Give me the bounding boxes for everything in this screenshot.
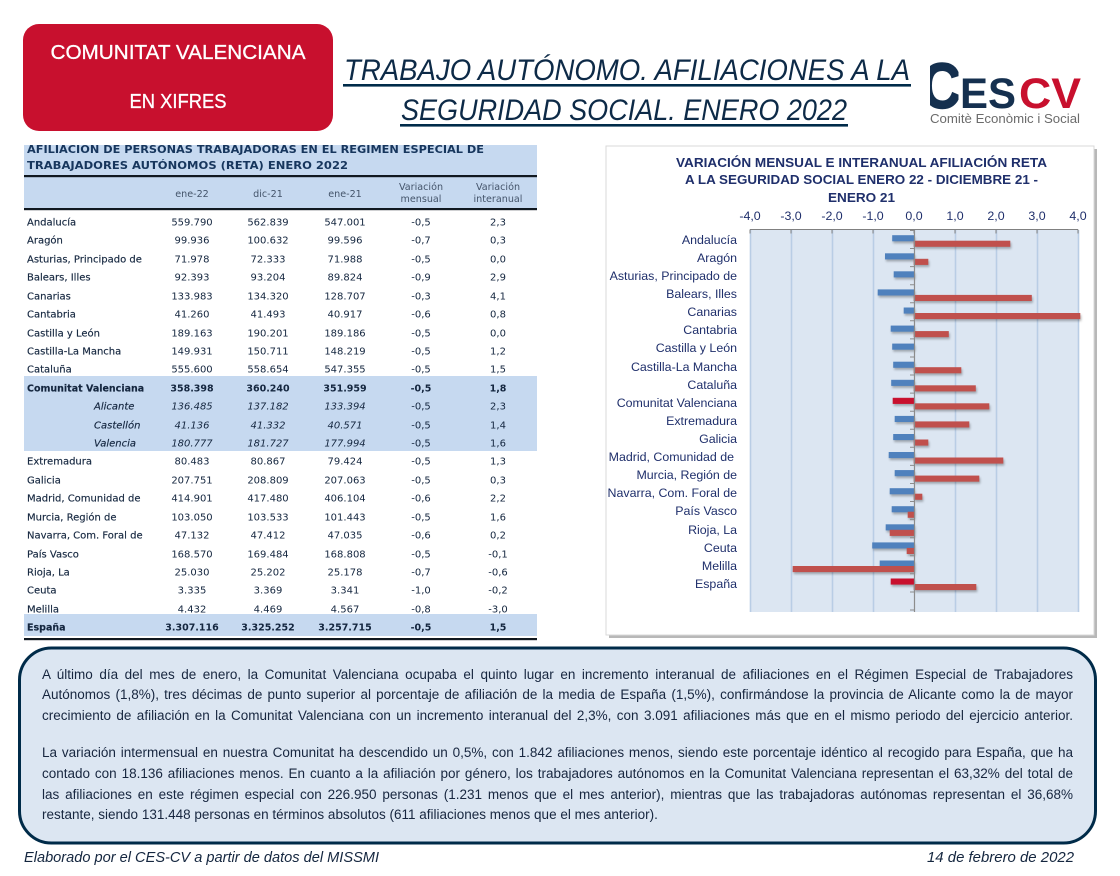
table rows: -0,6 [411, 494, 431, 504]
chart category labels: Andalucía [682, 233, 737, 247]
main title: SEGURIDAD SOCIAL. ENERO 2022 [401, 94, 847, 127]
chart category labels: Murcia, Región de [636, 468, 737, 482]
chart x axis labels [739, 209, 1087, 234]
table rows: Castellón [94, 420, 140, 432]
table rows: -0,5 [411, 328, 431, 340]
table rows: Cantabria [27, 310, 76, 320]
table rows: 40.917 [328, 310, 362, 320]
table rows: 181.727 [247, 438, 289, 450]
table rows: Castilla y León [27, 328, 100, 340]
table rows: 559.790 [171, 218, 213, 228]
table rows: 137.182 [247, 402, 289, 412]
red badge: Comunitat Valenciana en xifres: COMUNITAT VALENCIANA [50, 42, 306, 64]
table rows: Navarra, Com. Foral de [27, 530, 143, 542]
table rows: 99.596 [328, 236, 362, 246]
chart category labels: Castilla y León [656, 341, 737, 355]
chart category labels: País Vasco [675, 504, 737, 518]
table rows: 133.394 [324, 402, 366, 412]
table rows: 71.988 [328, 254, 362, 266]
table rows: 25.202 [250, 568, 286, 578]
table rows: 103.533 [247, 512, 289, 524]
table rows: -0,5 [411, 218, 431, 228]
table rows: 133.983 [171, 292, 213, 302]
table rows: -0,5 [411, 622, 431, 634]
chart category labels: Madrid, Comunidad de [609, 450, 734, 464]
table rows: -0,7 [411, 568, 431, 578]
chart x axis labels: 3,0 [1028, 209, 1046, 223]
table rows: 92.393 [174, 272, 210, 284]
table rows: 189.186 [324, 328, 366, 340]
chart x axis labels: -3,0 [780, 209, 802, 223]
chart x axis labels: -4,0 [739, 209, 761, 223]
table rows: 189.163 [171, 328, 213, 340]
chart category labels: Galicia [699, 432, 737, 446]
logo: CES-CV: C [921, 50, 961, 122]
table rows: Aragón [27, 234, 63, 246]
table column headers: mensual [401, 194, 441, 205]
table rows: 40.571 [328, 420, 362, 432]
chart title: VARIACIÓN MENSUAL E INTERANUAL AFILIACIÓN RETA [676, 155, 1048, 170]
table rows: -0,3 [411, 292, 431, 302]
table rows: -0,5 [411, 364, 431, 376]
table rows: Galicia [27, 476, 61, 486]
chart category labels: Rioja, La [688, 523, 737, 537]
table rows: 2,3 [490, 218, 506, 228]
text block: commentary: crecimiento de afiliación en la Comunitat Valenciana con un incremento interanual del 2,3%, con 3.091 afiliaciones más que en el mismo periodo del ejercicio anterior. [42, 708, 1073, 723]
chart category labels: Asturias, Principado de [610, 269, 737, 283]
table heading [27, 145, 484, 171]
table rows: -0,5 [411, 438, 431, 450]
table rows: Extremadura [27, 456, 92, 468]
chart category labels: Ceuta [704, 541, 737, 555]
table rows: -0,9 [411, 272, 431, 284]
table rows: 208.809 [247, 476, 289, 486]
table rows: Ceuta [27, 586, 57, 596]
chart category labels: Navarra, Com. Foral de [608, 486, 737, 500]
table rows: 47.132 [174, 530, 210, 542]
table rows: -0,5 [411, 254, 431, 266]
table rows: Valencia [94, 438, 136, 450]
chart title: ENERO 21 [828, 190, 895, 205]
table rows: 2,9 [490, 272, 506, 284]
chart category labels: Aragón [697, 251, 737, 265]
table rows: 47.412 [250, 530, 286, 542]
footer source: Elaborado por el CES-CV a partir de datos del MISSMI [24, 849, 379, 866]
logo: CES-CV: Comitè Econòmic i Social [930, 111, 1080, 126]
table rows: 547.355 [324, 364, 366, 376]
table rows: -3,0 [488, 604, 508, 616]
table rows: 134.320 [247, 292, 289, 302]
table rows: -0,5 [411, 420, 431, 432]
table rows: 207.063 [324, 476, 366, 486]
chart title [676, 155, 1048, 205]
table rows: -0,8 [411, 604, 431, 616]
table rows: 101.443 [324, 512, 366, 524]
table rows: 555.600 [171, 364, 213, 376]
table rows: 103.050 [171, 512, 213, 524]
chart category labels: Cataluña [687, 378, 737, 392]
chart category labels: Comunitat Valenciana [617, 396, 737, 410]
chart category labels: Balears, Illes [666, 287, 737, 301]
table column headers: Variación [476, 181, 520, 193]
table rows: Canarias [27, 292, 71, 302]
table rows: 3.335 [178, 586, 206, 596]
data table: afiliación RETA [24, 143, 537, 640]
table rows: -0,2 [488, 586, 508, 596]
text block: commentary: Autónomos (1,8%), tres décimas de punto superior al porcentaje de afiliación de la media de España (1,5%), confirmándose la provincia de Alicante como la de mayor [42, 687, 1073, 702]
table rows: 25.030 [174, 568, 210, 578]
table rows: -0,5 [411, 456, 431, 468]
table rows: Cataluña [27, 364, 72, 376]
text block: commentary: contado con 18.136 afiliaciones menos. En cuanto a la afiliación por género, los trabajadores autónomos en la Comunitat Valenciana representan el 63,32% del total de [42, 766, 1073, 781]
table rows: 99.936 [174, 236, 210, 246]
chart category labels: Extremadura [666, 414, 737, 428]
table rows: 180.777 [171, 438, 213, 450]
panel: commentary box background [20, 648, 1096, 843]
chart bars: variación mensual [872, 236, 914, 584]
logo: CES-CV: CV [1019, 70, 1081, 118]
table heading: TRABAJADORES AUTÓNOMOS (RETA) ENERO 2022 [27, 159, 348, 172]
table rows: 3.307.116 [165, 622, 219, 634]
table rows: 1,4 [490, 420, 506, 432]
table rows: 406.104 [324, 494, 366, 504]
chart x axis labels: 4,0 [1069, 209, 1087, 223]
table rows: 25.178 [328, 568, 362, 578]
text block: commentary: las afiliaciones en este régimen especial con 226.950 personas (1.231 menos que el mes anterior), mientras que las trabajadoras autónomas representan el 36,68% [42, 787, 1073, 802]
table column headers: ene-21 [328, 189, 362, 200]
table rows: 2,2 [490, 494, 506, 504]
table column headers: interanual [474, 194, 522, 205]
table rows: 1,6 [490, 512, 506, 524]
chart category labels [608, 233, 737, 591]
table column headers [175, 181, 522, 205]
text block: commentary: La variación intermensual en nuestra Comunitat ha descendido un 0,5%, con 1.842 afiliaciones menos, siendo este porcentaje idéntico al recogido para España, que ha [42, 745, 1073, 760]
table rows: 3.341 [331, 586, 359, 596]
table rows: Murcia, Región de [27, 512, 117, 524]
table rows: 3.325.252 [241, 622, 295, 634]
table rows: 1,6 [490, 438, 506, 450]
table rows: 207.751 [171, 476, 213, 486]
chart x axis labels: -1,0 [862, 209, 884, 223]
footer date: 14 de febrero de 2022 [927, 849, 1075, 866]
chart x axis labels: 2,0 [987, 209, 1005, 223]
table rows: 148.219 [324, 346, 366, 358]
table rows: 360.240 [246, 384, 290, 394]
table rows: 351.959 [323, 384, 367, 394]
table rows: España [27, 622, 66, 634]
table rows: 0,2 [490, 530, 506, 542]
table rows: -0,5 [411, 512, 431, 524]
table rows: 169.484 [247, 550, 289, 560]
table rows: Comunitat Valenciana [27, 384, 144, 394]
table rows: 417.480 [247, 494, 289, 504]
table rows: 558.654 [247, 364, 289, 376]
chart x axis labels: 0,0 [905, 209, 923, 223]
main title: TRABAJO AUTÓNOMO. AFILIACIONES A LA [344, 54, 910, 87]
table rows: 100.632 [247, 236, 289, 246]
table rows: -0,6 [488, 568, 508, 578]
table rows: 0,3 [490, 476, 506, 486]
red badge: Comunitat Valenciana en xifres [23, 24, 333, 131]
table rows: -0,6 [411, 530, 431, 542]
table rows: Balears, Illes [27, 272, 91, 284]
table column headers: ene-22 [175, 189, 209, 200]
table rows: 41.136 [174, 420, 210, 432]
table rows: 150.711 [247, 346, 289, 358]
chart vertical axis [910, 230, 914, 612]
table rows: Madrid, Comunidad de [27, 494, 140, 504]
table rows: Asturias, Principado de [27, 254, 142, 266]
table rows: 71.978 [174, 254, 210, 266]
table rows: 547.001 [324, 218, 366, 228]
table rows: 4.469 [254, 604, 282, 616]
table rows: 79.424 [328, 456, 362, 468]
table rows: 41.260 [174, 310, 210, 320]
table rows: -1,0 [411, 586, 431, 596]
table rows: -0,5 [411, 346, 431, 358]
table heading: AFILIACIÓN DE PERSONAS TRABAJADORAS EN EL RÉGIMEN ESPECIAL DE [27, 143, 484, 156]
main title [343, 54, 911, 127]
text block: commentary: A último día del mes de enero, la Comunitat Valenciana ocupaba el quinto lugar en incremento interanual de afiliaciones en el Régimen Especial de Trabajadores [42, 667, 1073, 682]
table rows: 89.824 [328, 272, 362, 284]
table rows: 128.707 [324, 292, 366, 302]
table rows: 168.808 [324, 550, 366, 560]
table rows: Melilla [27, 604, 59, 616]
logo: CES-CV [930, 62, 1081, 123]
chart x axis labels: 1,0 [946, 209, 964, 223]
table rows: -0,7 [411, 236, 431, 246]
table rows: 562.839 [247, 218, 289, 228]
chart x axis labels: -2,0 [821, 209, 843, 223]
table rows: 1,8 [490, 384, 507, 394]
table rows: 4.432 [178, 604, 206, 616]
logo: CES-CV: ES [960, 70, 1016, 118]
table rows: 0,8 [490, 310, 506, 320]
chart category labels: Canarias [687, 305, 737, 319]
table rows: 414.901 [171, 494, 213, 504]
table column headers: dic-21 [253, 189, 283, 200]
table column headers: Variación [399, 181, 443, 193]
panel: bar chart frame [606, 146, 1097, 638]
table rows: 47.035 [328, 530, 362, 542]
table rows: 3.369 [254, 586, 282, 596]
table rows: 0,0 [490, 254, 506, 266]
table rows: Rioja, La [27, 568, 70, 578]
table rows: -0,5 [411, 550, 431, 560]
chart category labels: Cantabria [683, 323, 737, 337]
table rows: -0,5 [411, 476, 431, 486]
table rows: Andalucía [27, 216, 76, 228]
table rows: 1,2 [490, 346, 506, 358]
chart title: A LA SEGURIDAD SOCIAL ENERO 22 - DICIEMBRE 21 - [685, 172, 1038, 187]
table rows: 93.204 [250, 272, 286, 284]
table rows: 4.567 [331, 604, 359, 616]
table rows: 72.333 [250, 254, 286, 266]
table rows: 80.483 [174, 456, 210, 468]
table rows: 41.332 [250, 420, 286, 432]
chart category labels: Castilla-La Mancha [631, 360, 737, 374]
table rows: 4,1 [490, 292, 506, 302]
red badge: Comunitat Valenciana en xifres: EN XIFRES [130, 91, 226, 113]
table rows: 358.398 [170, 384, 214, 394]
table rows: Castilla-La Mancha [27, 346, 121, 358]
chart category labels: España [695, 577, 737, 591]
table rows: -0,1 [488, 550, 508, 560]
table rows: 41.493 [250, 310, 286, 320]
text block: commentary: restante, siendo 131.448 personas en términos absolutos (611 afiliaciones menos que el mes anterior). [42, 807, 658, 822]
table rows: 1,5 [490, 364, 506, 376]
table rows: 149.931 [171, 346, 213, 358]
table rows: 1,5 [490, 622, 506, 634]
chart category labels: Melilla [702, 559, 737, 573]
table rows: 177.994 [324, 438, 366, 450]
table rows: 0,0 [490, 328, 506, 340]
table rows: -0,6 [411, 310, 431, 320]
table rows: 0,3 [490, 236, 506, 246]
table rows: 2,3 [490, 402, 506, 412]
table rows: 1,3 [490, 456, 506, 468]
table rows: 3.257.715 [318, 622, 372, 634]
table rows: -0,5 [411, 402, 431, 412]
table rows: País Vasco [27, 548, 79, 560]
chart bars: variación interanual [793, 241, 1080, 590]
table rows: -0,5 [411, 384, 431, 394]
table rows [27, 216, 508, 634]
table rows: 190.201 [247, 328, 289, 340]
table rows: 80.867 [250, 456, 286, 468]
table rows: 168.570 [171, 550, 213, 560]
table rows: 136.485 [171, 402, 213, 412]
table rows: Alicante [93, 402, 134, 412]
chart plot area and gridlines [750, 230, 1079, 612]
